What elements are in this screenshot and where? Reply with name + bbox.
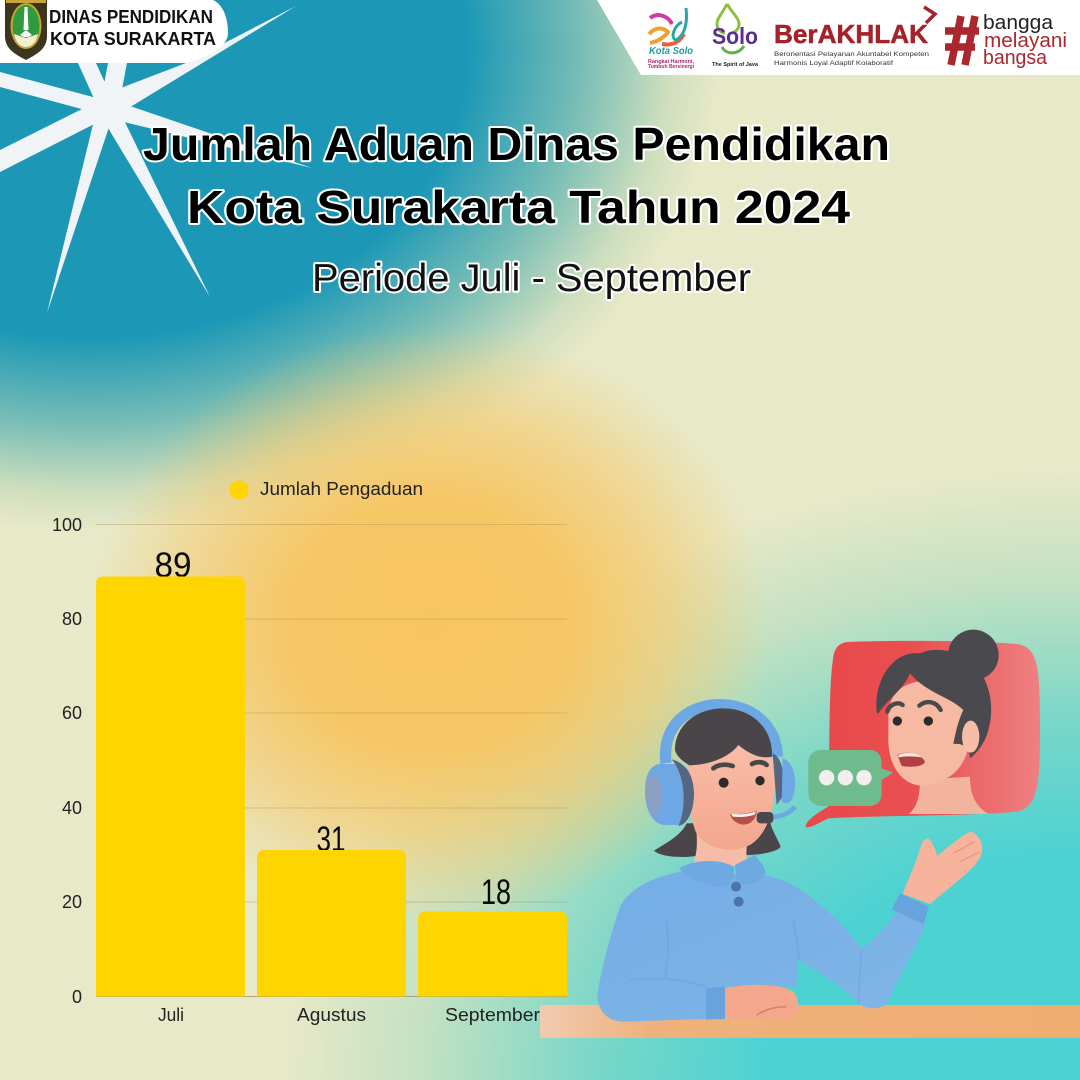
logo: BerAKHLAK <box>774 7 935 67</box>
logo: bangga melayani bangsa <box>945 12 1067 69</box>
desk <box>540 1005 1080 1038</box>
headband <box>666 705 777 763</box>
organisation name: DINAS PENDIDIKAN <box>49 7 213 27</box>
bar chart <box>52 478 567 1025</box>
x axis labels: Agustus <box>297 1005 366 1025</box>
logo: Kota Solo <box>648 8 694 70</box>
lower hair <box>654 822 781 857</box>
x axis labels <box>158 1005 540 1025</box>
illustration: call-centre agent and customer <box>597 630 1040 1022</box>
title: Jumlah Aduan Dinas Pendidikan <box>143 118 890 170</box>
title <box>143 118 890 233</box>
y axis gridlines and labels: 60 <box>62 703 82 723</box>
value labels: 31 <box>316 820 346 859</box>
header: city education office logo <box>0 0 228 63</box>
face <box>688 745 775 850</box>
collar <box>679 861 734 887</box>
forearm cuff <box>706 987 725 1019</box>
logo: Kota Solo: Rangkai Harmoni, <box>648 59 694 65</box>
bars <box>96 576 567 996</box>
logo: Kota Solo: Tumbuh Bersinergi <box>648 64 694 70</box>
right ear cup <box>773 753 784 805</box>
organisation name <box>49 7 216 49</box>
subtitle: Periode Juli - September <box>312 257 751 300</box>
icon: city crest shield <box>5 0 47 60</box>
y axis gridlines and labels: 80 <box>62 609 82 629</box>
logo: bangga melayani bangsa: bangga <box>983 12 1054 34</box>
logo: bangga melayani bangsa: melayani <box>984 30 1067 52</box>
agent figure <box>597 705 982 1022</box>
facial features <box>719 778 729 788</box>
neck <box>693 833 748 867</box>
organisation name: KOTA SURAKARTA <box>50 29 216 49</box>
x axis labels: Juli <box>158 1005 184 1025</box>
fringe <box>675 708 772 765</box>
left ear cup <box>645 764 693 825</box>
y axis gridlines and labels <box>52 515 567 1007</box>
customer figure <box>876 630 999 814</box>
y axis gridlines and labels: 40 <box>62 798 82 818</box>
logo: Solo The Spirit of Java <box>712 4 759 68</box>
header: partner logos <box>597 0 1080 75</box>
green chat bubble <box>808 750 893 806</box>
title: Kota Surakarta Tahun 2024 <box>187 181 850 233</box>
x axis labels: September <box>445 1005 540 1025</box>
value labels <box>154 546 511 912</box>
raised hand <box>903 831 982 904</box>
y axis gridlines and labels: 100 <box>52 515 82 535</box>
value labels: 89 <box>154 546 192 585</box>
y axis gridlines and labels: 20 <box>62 892 82 912</box>
resting hand <box>725 985 798 1019</box>
logo: bangga melayani bangsa: bangsa <box>983 47 1048 69</box>
value labels: 18 <box>481 873 511 912</box>
shirt and arm <box>597 872 927 1022</box>
legend: Jumlah Pengaduan <box>260 478 423 499</box>
logo: Solo The Spirit of Java: Solo <box>712 23 758 49</box>
y axis gridlines and labels: 0 <box>72 987 82 1007</box>
logo: BerAKHLAK: Berorientasi Pelayanan Akuntabel Kompeten <box>774 51 929 58</box>
starburst rays <box>0 6 312 313</box>
sleeve creases <box>630 920 862 1003</box>
customer speech bubble <box>806 630 1040 827</box>
logo: Solo The Spirit of Java: The Spirit of Java <box>712 62 759 68</box>
logo: Kota Solo: Kota Solo <box>649 45 694 57</box>
logo: BerAKHLAK: BerAKHLAK <box>774 19 928 49</box>
logo: BerAKHLAK: Harmonis Loyal Adaptif Kolaboratif <box>774 60 893 67</box>
raised cuff <box>892 893 929 924</box>
microphone <box>768 807 795 817</box>
